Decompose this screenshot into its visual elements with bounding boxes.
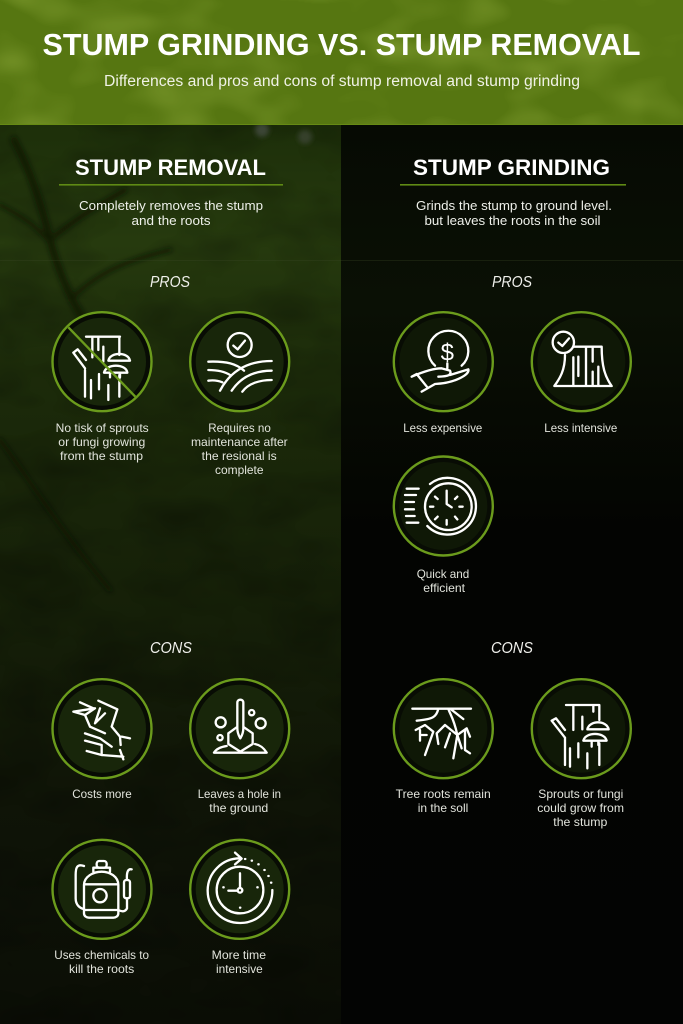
header band bbox=[0, 0, 683, 125]
icon: stump with mushrooms bbox=[552, 705, 609, 768]
heading: grinding pros: PROS bbox=[492, 274, 533, 291]
subtitle: Differences and pros and cons of stump removal and stump grinding bbox=[104, 73, 580, 90]
caption: Uses chemicals to bbox=[54, 948, 149, 962]
caption: in the soll bbox=[418, 801, 468, 815]
caption: Tree roots remain bbox=[396, 787, 491, 801]
title: STUMP GRINDING VS. STUMP REMOVAL bbox=[42, 27, 640, 62]
caption: could grow from bbox=[537, 801, 624, 815]
caption: Sprouts or fungi bbox=[538, 787, 623, 801]
item: costs more bbox=[52, 679, 152, 801]
caption bbox=[537, 787, 624, 829]
caption: from the stump bbox=[60, 449, 143, 463]
description: and the roots bbox=[132, 213, 211, 228]
caption bbox=[212, 948, 266, 976]
item: no risk of sprouts bbox=[52, 312, 152, 463]
item: leaves a hole bbox=[190, 679, 289, 815]
item: quick and efficient bbox=[394, 456, 493, 595]
caption: No tisk of sprouts bbox=[56, 421, 149, 435]
description: Grinds the stump to ground level. bbox=[416, 198, 612, 213]
caption: Leaves a hole in bbox=[198, 787, 281, 801]
heading: grinding cons: CONS bbox=[491, 640, 534, 657]
heading: stump grinding: STUMP GRINDING bbox=[413, 155, 610, 180]
caption: or fungi growing bbox=[58, 435, 145, 449]
caption: More time bbox=[212, 948, 266, 962]
description: but leaves the roots in the soil bbox=[424, 213, 601, 228]
caption bbox=[191, 421, 288, 477]
item: requires no maintenance bbox=[190, 312, 289, 477]
caption bbox=[54, 948, 149, 976]
icon: fast clock bbox=[405, 478, 476, 535]
panel: stump grinding heading bbox=[400, 155, 626, 228]
item: uses chemicals bbox=[52, 840, 152, 976]
icon: hand gripping money bbox=[73, 701, 130, 759]
caption: the resional is bbox=[202, 449, 277, 463]
caption: intensive bbox=[216, 962, 263, 976]
caption: Quick and bbox=[417, 567, 469, 581]
caption: maintenance after bbox=[191, 435, 288, 449]
caption: Requires no bbox=[208, 421, 271, 435]
caption bbox=[417, 567, 469, 595]
caption: the stump bbox=[553, 815, 608, 829]
heading: removal cons: CONS bbox=[150, 640, 193, 657]
item: less expensive bbox=[394, 312, 493, 435]
item: more time intensive bbox=[190, 840, 289, 976]
caption: efficient bbox=[423, 581, 466, 595]
background: right panel bbox=[341, 125, 683, 452]
item: sprouts or fungi bbox=[532, 679, 631, 829]
panel: stump removal heading bbox=[59, 155, 283, 228]
description bbox=[416, 198, 612, 228]
caption: Less expensive bbox=[403, 421, 483, 435]
heading: removal pros: PROS bbox=[150, 274, 191, 291]
item: less intensive bbox=[532, 312, 631, 435]
caption: Costs more bbox=[72, 787, 132, 801]
description: Completely removes the stump bbox=[79, 198, 263, 213]
background: left panel bbox=[0, 123, 341, 1024]
caption bbox=[396, 787, 491, 815]
item: tree roots remain bbox=[394, 679, 493, 815]
icon: shovel in ground bbox=[214, 700, 267, 753]
icon: stump with check mark bbox=[553, 332, 612, 386]
icon: clock with circular arrow bbox=[208, 853, 272, 923]
heading underline bbox=[400, 184, 626, 186]
icon: tree roots bbox=[412, 709, 471, 758]
icon: hand holding coin: $ bbox=[441, 340, 454, 367]
caption: the ground bbox=[209, 801, 268, 815]
heading underline bbox=[59, 184, 283, 186]
icon: stump with mushrooms crossed out bbox=[68, 327, 135, 400]
caption: kill the roots bbox=[69, 962, 134, 976]
description bbox=[79, 198, 263, 228]
caption bbox=[198, 787, 281, 815]
caption: complete bbox=[215, 463, 264, 477]
heading: stump removal: STUMP REMOVAL bbox=[75, 155, 266, 180]
caption: Less intensive bbox=[544, 421, 618, 435]
icon: fields with check mark bbox=[208, 333, 272, 392]
caption bbox=[56, 421, 149, 463]
icon: chemical sprayer bbox=[76, 861, 132, 918]
